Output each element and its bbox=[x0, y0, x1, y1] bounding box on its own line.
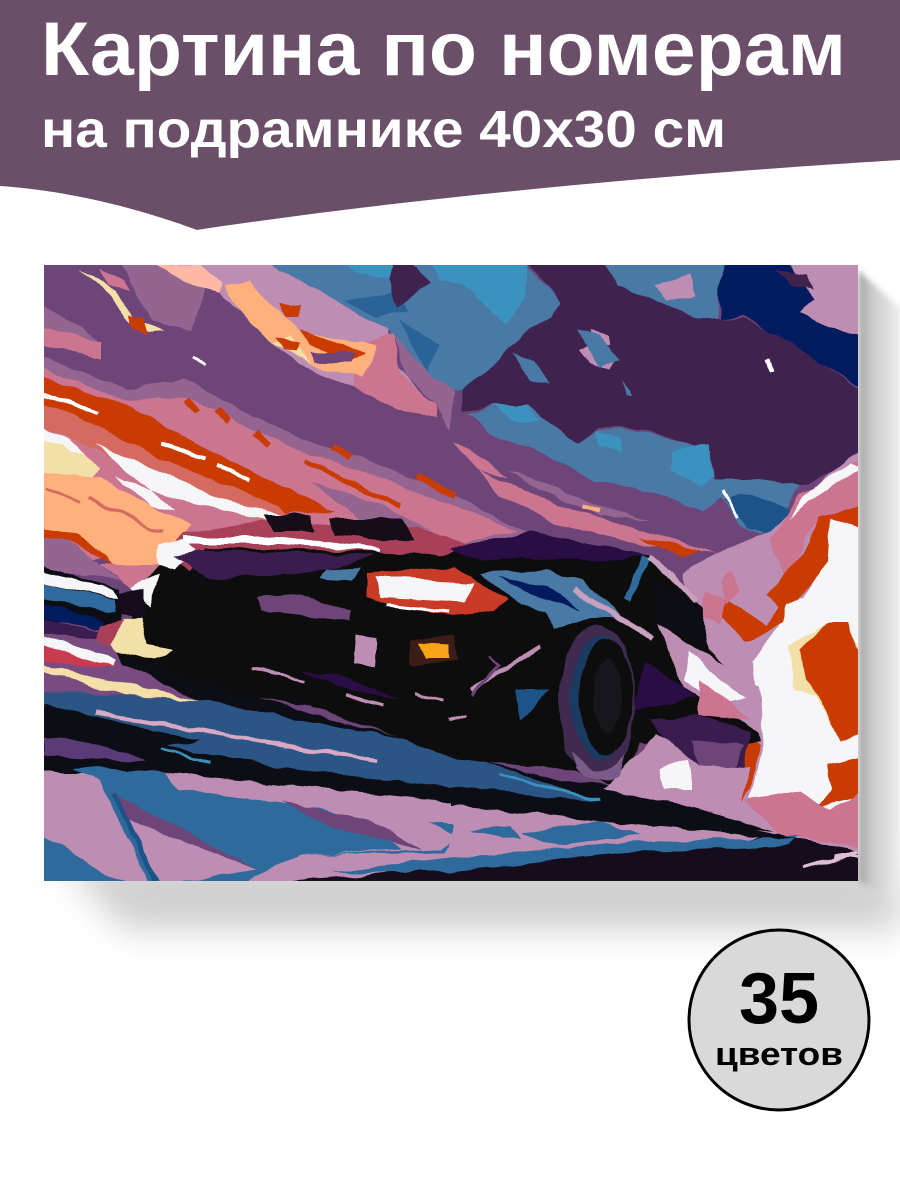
rose sunset band bbox=[20, 350, 716, 560]
blue clouds centre top bbox=[272, 265, 725, 391]
sky base bbox=[44, 265, 858, 814]
badge: 35 colours bbox=[689, 930, 869, 1110]
smoke cloud right bbox=[682, 452, 858, 853]
badge label: цветов bbox=[715, 1036, 843, 1072]
sunset orange stripe and peach sky bbox=[44, 376, 335, 588]
body purple panels bbox=[257, 595, 350, 620]
car bbox=[95, 515, 763, 817]
blue cloud band bbox=[467, 405, 800, 535]
pink and peach clouds upper left bbox=[20, 255, 454, 430]
pink mist on roof bbox=[165, 520, 470, 570]
roof line highlight bbox=[181, 536, 381, 552]
road bbox=[44, 566, 858, 881]
left tail light edge bbox=[110, 617, 174, 658]
title: Картина по номерам bbox=[41, 7, 846, 92]
plate accent bbox=[354, 635, 376, 665]
rear wheel bbox=[559, 625, 635, 781]
dark purple storm clouds bbox=[463, 255, 870, 485]
side body blue bbox=[480, 570, 623, 630]
speed streaks left bbox=[44, 572, 198, 702]
badge number: 35 bbox=[739, 959, 819, 1039]
header banner bbox=[0, 0, 900, 230]
amber light bbox=[410, 637, 458, 665]
painting: drifting sports car at sunset bbox=[44, 265, 858, 881]
windscreen arc bbox=[450, 532, 650, 560]
canvas shadow bbox=[60, 270, 900, 930]
car body bbox=[124, 525, 760, 790]
roof top shapes bbox=[264, 515, 415, 542]
subtitle: на подрамнике 40х30 см bbox=[41, 101, 726, 159]
white glare bbox=[158, 540, 195, 570]
mauve dust below car bbox=[603, 733, 750, 817]
glowing tail light bbox=[367, 567, 507, 615]
